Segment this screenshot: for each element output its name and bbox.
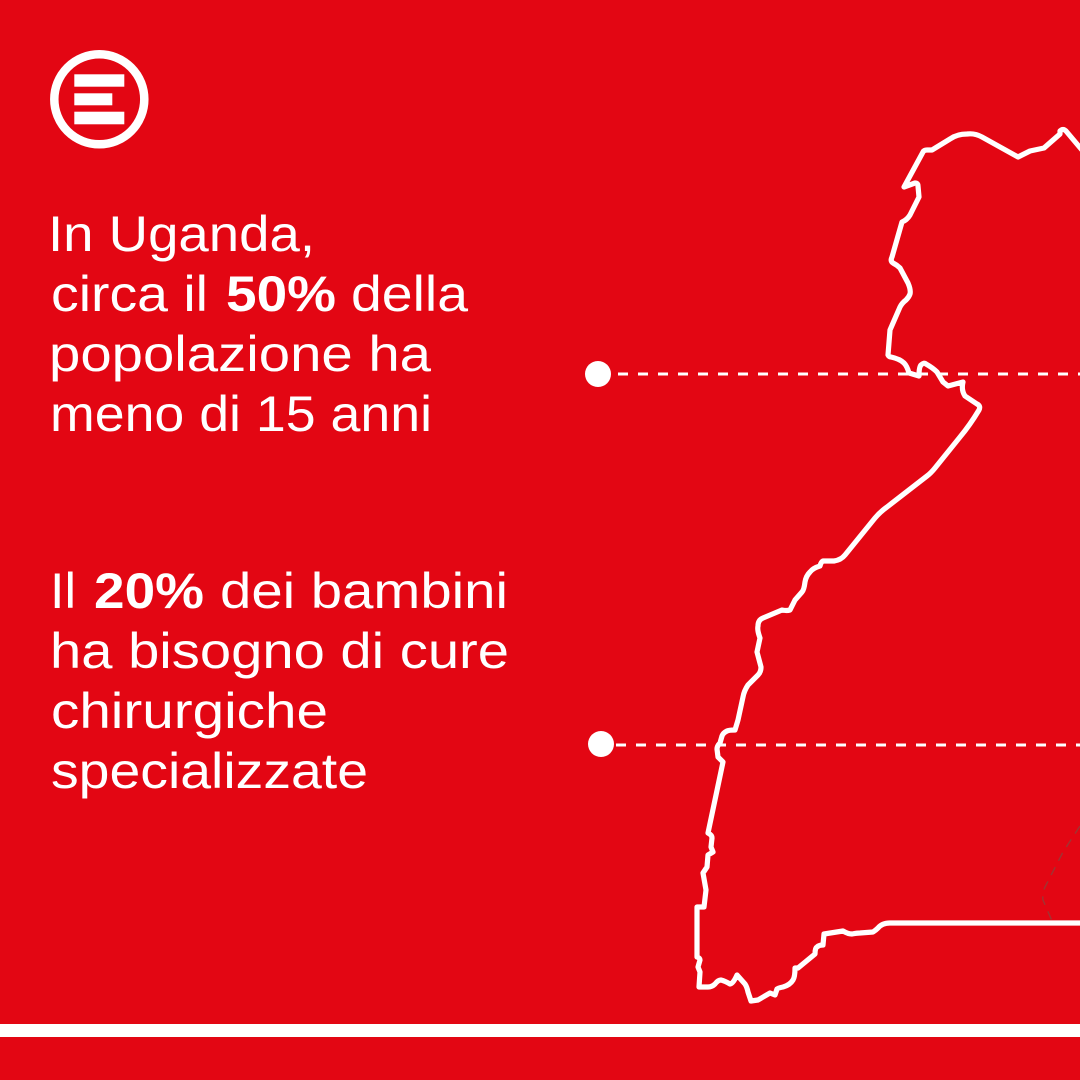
text block: population under 15: 50% — [226, 266, 336, 322]
text block: children needing surgery: ha bisogno di cure — [50, 623, 509, 679]
text block: children needing surgery: dei bambini — [220, 563, 508, 619]
text block: population under 15: della — [351, 266, 468, 322]
text block: population under 15: popolazione ha — [49, 326, 431, 382]
marker line: 50% callout — [585, 361, 1080, 387]
text block: children needing surgery: 20% — [94, 563, 204, 619]
text block: population under 15: meno di 15 anni — [50, 386, 432, 442]
text block: population under 15: In Uganda, — [48, 206, 315, 262]
text block: children needing surgery: Il — [50, 563, 76, 619]
text block: children needing surgery — [50, 563, 509, 799]
text block: children needing surgery: specializzate — [51, 743, 368, 799]
map: faint dashed internal border — [1043, 826, 1080, 921]
map: outline of Uganda — [697, 130, 1080, 1001]
logo: Emergency E in a circle — [54, 54, 144, 144]
bottom white band — [0, 1024, 1080, 1037]
marker line: 20% callout — [588, 731, 1080, 757]
text block: children needing surgery: chirurgiche — [51, 683, 328, 739]
text block: population under 15: circa il — [51, 266, 208, 322]
text block: population under 15 — [48, 206, 468, 442]
